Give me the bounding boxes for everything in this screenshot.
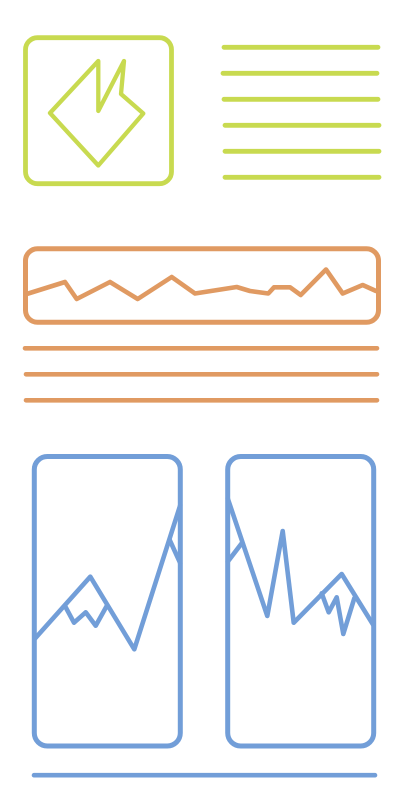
icon: right edge branch (228, 543, 242, 562)
panel: orange text lines (25, 348, 377, 400)
icon: right inner peak line (322, 593, 354, 634)
blue footer line (34, 773, 375, 778)
chart line: orange series (27, 270, 376, 299)
orange rounded frame (26, 249, 378, 322)
icon: notched diamond (50, 61, 143, 166)
panel: orange line chart (26, 249, 378, 322)
panel: green icon group (26, 38, 172, 184)
left blue rounded frame (34, 456, 180, 746)
right blue rounded frame (228, 456, 374, 746)
panel: left blue chart (34, 456, 180, 746)
chart line: left main series (34, 505, 180, 649)
chart line: right main series (228, 498, 373, 625)
icon: left inner peak line (65, 606, 107, 626)
panel: right blue chart (228, 456, 374, 746)
panel: green text lines (223, 47, 379, 177)
green rounded frame (26, 38, 172, 184)
icon: left edge branch (170, 540, 180, 563)
